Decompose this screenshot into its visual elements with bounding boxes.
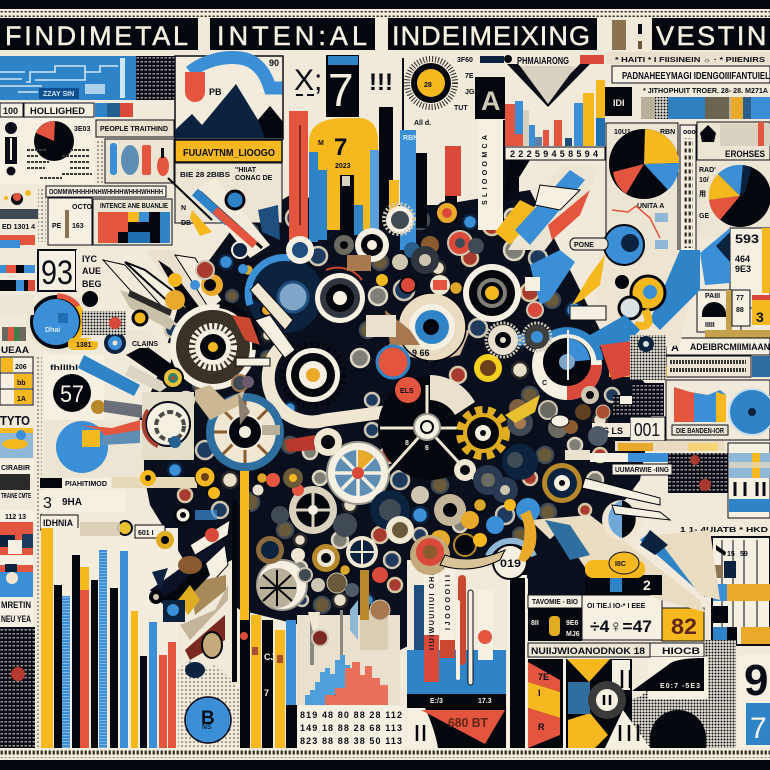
- heading: FINDIMETAL: FINDIMETAL: [5, 21, 188, 51]
- panel: left top rows: [0, 187, 46, 291]
- gear: big target: [283, 345, 343, 405]
- panel: blue dial: 1381: [76, 342, 92, 349]
- cog cluster right of centre: [434, 323, 670, 529]
- panel: sun dial: TUT: [454, 105, 468, 112]
- gear: white ring target: [463, 264, 521, 322]
- gear: lower left wheel: [206, 393, 284, 471]
- panel: big pie chart: UNITA A: [637, 203, 664, 210]
- cog cluster upper centre: [165, 202, 543, 337]
- bottom-left mosaic column: NEU YEA: [1, 614, 31, 624]
- panel: formula row: 9E6: [566, 620, 579, 627]
- diagonal rays: lower left: [80, 507, 232, 678]
- panel: number table: 149 18 88 28 68 113: [300, 723, 402, 733]
- gear: upper ring with blue arc: [232, 257, 365, 358]
- vertical bars lower centre: [232, 450, 297, 748]
- panel: black pie: [0, 118, 94, 184]
- cream sketch arms: [195, 282, 293, 425]
- panel: letter A column: [475, 77, 519, 230]
- panel: red triangle label: 680 BT: [448, 715, 488, 730]
- small key icon: [480, 55, 604, 64]
- cog cluster lower centre: [252, 428, 536, 646]
- panel: 57 circle: [44, 355, 104, 420]
- panel: numbers note: "HIIAT: [235, 167, 257, 174]
- panel: letter A column: A: [481, 86, 500, 116]
- label strips under pie: 9HA: [62, 497, 82, 508]
- big cream arc: [268, 345, 385, 422]
- panel: wedge diagram: [528, 659, 650, 748]
- yellow medium circles: ELS: [400, 388, 414, 395]
- panel: grid heatmap: OCTO: [72, 204, 93, 211]
- panel: formula row: 8II: [531, 620, 539, 627]
- eye dial: [377, 293, 470, 378]
- heading: INDEIMEIXING: INDEIMEIXING: [392, 21, 590, 51]
- wheel: spoked white: [327, 442, 389, 504]
- panel: yellow title strip: FUUAVTNM_LIOOGO: [183, 147, 275, 159]
- panel: long label: [528, 643, 650, 657]
- panel: 593 stacked numbers: [700, 228, 770, 308]
- vertical bars lower centre: CJ: [264, 652, 276, 662]
- panel: right pie chart: 10/: [699, 177, 709, 184]
- panel: big pie chart: RBN: [660, 129, 675, 136]
- left column small tiles: UEAA: [1, 345, 30, 355]
- panel: numbers note: N: [181, 205, 186, 212]
- panel: top-right label strips: * JITHOPHUIT TROER. 28- 28. M271A: [643, 88, 768, 95]
- panel: mid right boxes: [667, 290, 770, 338]
- panel: formula row: [528, 565, 704, 641]
- panel: top-left label row: 100: [3, 106, 18, 116]
- diagonal rays: upper left: CLAINS: [132, 341, 158, 348]
- panel: 93 number box: 93: [41, 254, 73, 292]
- panel: barcode column: ooo: [683, 129, 696, 136]
- panel: big 9 tile: 7: [750, 712, 767, 745]
- panel: 001 box: [592, 383, 665, 441]
- bottom halftone disc: B: [201, 708, 215, 729]
- panel: numbers note: DB: [181, 220, 191, 227]
- panel: blue dial: Dhai: [45, 327, 60, 334]
- person icon: [5, 122, 17, 176]
- panel: top-right label strips: * HAITI * I FIISINEIN ☼ · * PIIENIRS: [615, 57, 765, 64]
- left column small tiles: TYTO: [0, 413, 30, 428]
- panel: right strips: [666, 338, 770, 377]
- circle tag with vertical bar: 019: [500, 558, 521, 570]
- panel: top-left label row: [0, 103, 133, 117]
- panel: right grid table: [728, 443, 770, 518]
- panel: right heat strip: UUMARWIE -IING: [615, 467, 670, 474]
- panel: sun dial: 7E: [465, 73, 474, 80]
- bottom black border band: [0, 749, 770, 770]
- panel: bottom right table: 1 1- 4UIATB * HKD: [680, 527, 768, 534]
- panel: 593 stacked numbers: 593: [735, 232, 759, 246]
- black glyph box: [605, 87, 632, 116]
- panel: black labelled wedge: HIOCB: [662, 646, 701, 656]
- diagonal rays: upper right: [495, 160, 700, 380]
- panel: top bar chart: PHMAIARONG: [517, 56, 569, 67]
- panel: wedge diagram: I: [538, 688, 541, 698]
- panel: number table: 819 48 80 88 28 112: [300, 710, 402, 720]
- label strips under pie: [40, 470, 197, 530]
- panel: right strips: A: [671, 342, 679, 354]
- panel: half disc with yellow pill: [528, 500, 720, 612]
- circle tag with vertical bar: [488, 541, 534, 748]
- heading: INTEN:AL: INTEN:AL: [217, 21, 367, 51]
- spoked black wheel: 8: [405, 440, 409, 447]
- panel: bottom-centre blue gauge: IJOOOOIII: [445, 575, 452, 630]
- left column small tiles: TRAINE CMTE: [1, 493, 31, 500]
- big 7 block: 7: [328, 64, 354, 116]
- vertical colour bars: All d.: [414, 120, 431, 127]
- panel: big 9 tile: [738, 655, 770, 747]
- panel: area chart and globe: DIE BANDEN-IOR: [676, 428, 724, 435]
- bottom halftone disc: NS: [202, 724, 212, 731]
- left column small tiles: 1A: [17, 396, 26, 403]
- panel: formula row: TAVOMIE - BIO: [532, 599, 579, 606]
- panel: sun dial: 28: [424, 82, 432, 89]
- panel: 57 circle: 57: [60, 381, 84, 408]
- left column small tiles: 206: [15, 364, 27, 371]
- panel: 001 box: 001: [634, 420, 660, 440]
- panel: 93 number box: [38, 250, 104, 292]
- panel: barcode column: [680, 125, 696, 255]
- panel: right pie chart: GE: [699, 213, 709, 220]
- panel: top-left blue chart: ZZAY SIN: [43, 91, 74, 98]
- dial: split gauge: C: [542, 380, 547, 387]
- halftone arch: [625, 640, 736, 748]
- panel: sun dial: JGI: [465, 89, 476, 96]
- panel: letter A column: SLIOOOMCA: [482, 135, 489, 205]
- symbols: X and exclamation: X;: [294, 64, 322, 97]
- panel: sun dial: [403, 57, 476, 130]
- bottom-left mosaic column: 112 13: [5, 514, 26, 521]
- panel: grid heatmap: INTENCE ANE BUANLIE: [100, 203, 168, 210]
- panel: blue pie: [44, 400, 144, 482]
- panel: grid heatmap: 163: [72, 223, 84, 230]
- panel: sun dial: 3F60: [457, 57, 473, 64]
- panel: numbers note: [175, 163, 282, 227]
- panel: sketch tile: [142, 392, 194, 460]
- panel: grid heatmap: PE: [52, 223, 62, 230]
- label strips under pie: IDHNIA: [43, 518, 73, 528]
- black glyph box: IDI: [613, 98, 625, 108]
- panel: right pie chart: 用: [699, 190, 706, 198]
- panel: 93 number box: AUE: [82, 266, 101, 276]
- panel: red triangle label: [407, 706, 506, 748]
- label strip: OOMMWHHHHHNHWHHHHWHHHWHHHH: [49, 189, 163, 196]
- panel: formula row: #3 ·55: [530, 577, 556, 587]
- bottom-left mosaic column: [0, 510, 40, 748]
- left column small tiles: bb: [17, 380, 26, 387]
- panel: right pie chart: [697, 162, 770, 237]
- label strips under pie: 3: [43, 495, 52, 512]
- panel: top-left label row: HOLLIGHED: [30, 106, 86, 116]
- panel: black labelled wedge: E0:7 -5E3: [660, 683, 700, 690]
- blue diagonal callout: [78, 355, 170, 396]
- panel: long label: NUIIJWIOANODNOK 18: [531, 646, 645, 656]
- panel: formula row: ÷4♀=47: [590, 617, 652, 636]
- panel: numbers note: CONAC DE: [235, 175, 273, 182]
- bottom halftone disc: [178, 650, 240, 748]
- panel: number table: 823 88 88 38 50 113: [300, 736, 402, 746]
- small cog texture filling the cluster: [165, 206, 619, 613]
- panel: blue dial: [26, 293, 98, 353]
- panel: 001 box: ES LS: [597, 426, 623, 436]
- panel: top bar chart: 2 2 2 5 9 4 5 8 5 9 4: [510, 149, 598, 159]
- panel: mid right boxes: 88: [736, 307, 744, 314]
- callout: yellow tag: MADCER TAAISTN: [612, 370, 664, 377]
- yellow arched bar chart: 2023: [335, 163, 351, 170]
- yellow arched bar chart: M: [318, 140, 324, 147]
- gear: left ring: [170, 304, 256, 390]
- small title glyph column: [612, 20, 642, 50]
- panel: big pie chart: [606, 123, 679, 253]
- panel: mid right boxes: PAIII: [705, 293, 720, 300]
- diagonal rays: lower left: 601 I: [138, 530, 154, 537]
- top black border band: [0, 0, 770, 17]
- panel: formula row: OI TIE.I IO-* I EEE: [587, 603, 646, 610]
- panel: big pie chart: 10U1: [614, 129, 631, 136]
- symbols: X and exclamation: [294, 64, 393, 97]
- left column small tiles: [0, 295, 42, 515]
- panel: right icons: EROHSES: [725, 149, 765, 159]
- panel: black labelled wedge: [632, 643, 708, 699]
- panel: people traits label: [96, 120, 174, 137]
- panel: blue and red shapes: [96, 139, 174, 183]
- panel: histogram: [297, 610, 400, 705]
- panel: people traits label: PEOPLE TRAITHIND: [100, 126, 168, 133]
- panel: bottom-centre blue gauge: IIUIWUUIIIUI OHII: [429, 570, 436, 650]
- callout: yellow tag: [609, 366, 667, 377]
- panel: 93 number box: BEG: [82, 279, 102, 289]
- panel: bottom-centre blue gauge: 17.3: [478, 698, 492, 705]
- symbols: X and exclamation: !!!: [369, 69, 393, 96]
- yellow arched bar chart: 7: [334, 134, 347, 161]
- panel: mountain map: PB: [209, 87, 222, 97]
- diagonal rays: upper right: PONE: [574, 242, 594, 249]
- panel: grid heatmap: [48, 198, 172, 245]
- spoked black wheel: [378, 375, 482, 480]
- dial: split gauge: [532, 330, 602, 400]
- panel: number table: [297, 706, 405, 749]
- eye dial: 9 66: [412, 348, 430, 358]
- vertical colour bars: [389, 120, 461, 250]
- panel: numbers note: BIE 28 2BIBS: [180, 172, 230, 179]
- panel: bottom-centre blue gauge: E:/3: [430, 698, 443, 705]
- diagonal rays: upper left: [82, 178, 280, 385]
- panel: big 9 tile: 9: [744, 656, 768, 705]
- panel: wedge diagram: R: [538, 722, 545, 732]
- big 7 block: [326, 55, 359, 117]
- panel: mountain map: 90: [269, 58, 279, 68]
- label strips under pie: PIAHITIMOD: [65, 481, 107, 488]
- heading row: [0, 18, 770, 51]
- panel: mid right boxes: IIIII: [705, 322, 715, 329]
- panel: formula row: MJ6: [566, 631, 580, 638]
- panel: top-right label strips: [606, 52, 770, 119]
- left column small tiles: CIRABIR: [1, 465, 30, 472]
- bottom-left mosaic column: MRETIN: [1, 600, 31, 610]
- spoked black wheel: 6: [425, 445, 429, 452]
- panel: half disc with yellow pill: IIIC: [615, 561, 626, 568]
- vertical colour bars: RBN: [403, 135, 418, 142]
- label strip: [46, 186, 166, 197]
- panel: mid right boxes: 3: [756, 309, 764, 325]
- panel: bottom right table: [660, 522, 770, 645]
- pie chart: [34, 121, 74, 161]
- panel: top bar chart: [505, 56, 605, 160]
- panel: half disc with yellow pill: 2: [643, 577, 651, 593]
- panel: mountain map: [175, 56, 283, 139]
- panel: right pie chart: RAD': [699, 167, 716, 174]
- panel: 593 stacked numbers: 464: [735, 254, 750, 264]
- panel: mid right boxes: 77: [736, 295, 744, 302]
- panel: left top rows: ED 1301 4: [2, 224, 35, 231]
- panel: 93 number box: IYC: [82, 254, 98, 264]
- yellow arched bar chart: [289, 107, 393, 245]
- panel: bottom bar chart: [41, 528, 178, 748]
- panel: top-left blue chart: [0, 56, 175, 100]
- yellow medium circles: [118, 354, 502, 535]
- panel: yellow title strip: [175, 140, 282, 162]
- panel: wedge diagram: 7E: [538, 672, 549, 682]
- panel: 57 circle: fhlllhl: [50, 365, 78, 372]
- panel: formula row: 82: [671, 614, 697, 639]
- panel: bottom right table: 15: [727, 551, 735, 558]
- panel: right heat strip: [590, 441, 728, 493]
- panel: bottom-centre blue gauge: [407, 555, 507, 706]
- panel: 593 stacked numbers: 9E3: [735, 264, 751, 274]
- panel: black pie: 3E03: [74, 126, 90, 133]
- central dark cluster ground: [135, 190, 655, 650]
- panel: area chart and globe: [666, 380, 770, 440]
- gear: yellow cog: [461, 411, 505, 455]
- panel: right icons: [697, 122, 770, 160]
- vertical bars lower centre: 7: [264, 688, 269, 698]
- panel: mid right boxes: rt: [670, 297, 677, 307]
- panel: bottom right table: 59: [740, 551, 748, 558]
